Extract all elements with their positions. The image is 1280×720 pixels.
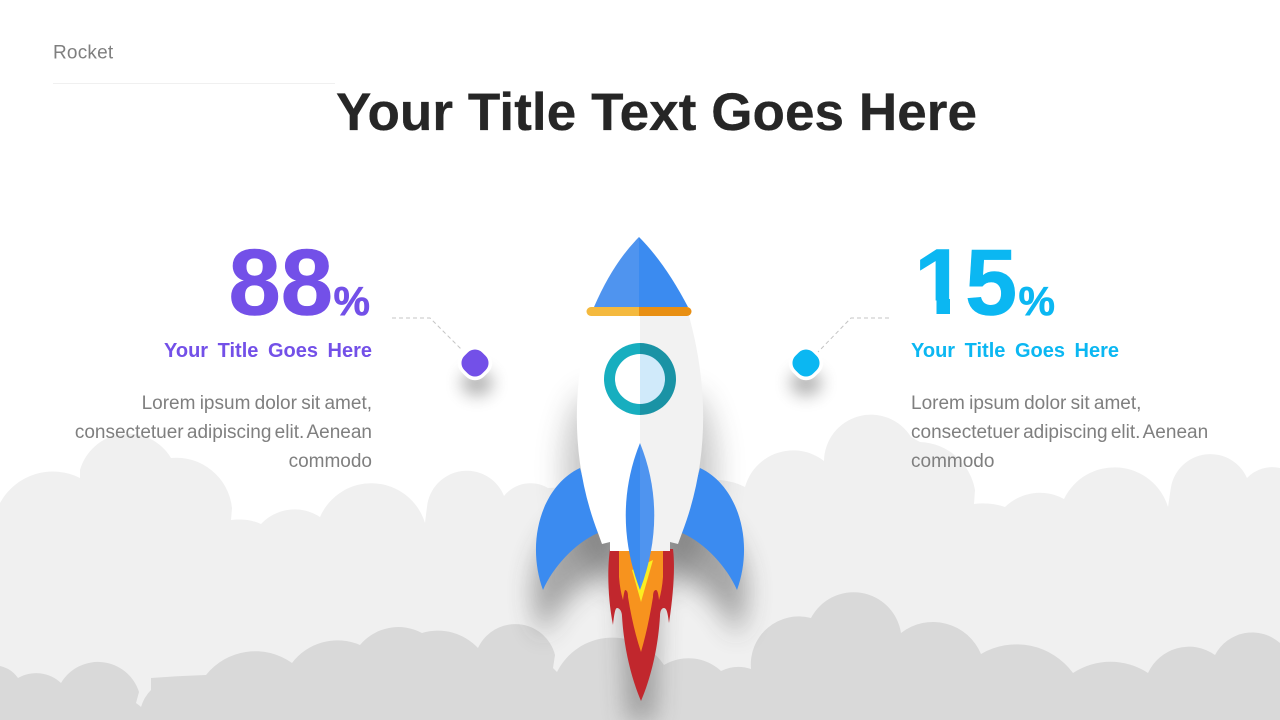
left stat body: commodo: [289, 451, 372, 472]
body right half: [640, 316, 703, 551]
right marker dot: [783, 340, 829, 396]
body left half: [577, 316, 640, 551]
back cloud layer: [0, 415, 1280, 720]
left stat heading: Your Title Goes Here: [164, 340, 372, 362]
left stat number: 88: [228, 230, 333, 334]
rocket wing and flame shadow: [533, 513, 747, 720]
flame: red outer: [608, 549, 674, 701]
window glass left: [615, 354, 640, 404]
right stat body: Lorem ipsum dolor sit amet,: [911, 393, 1141, 414]
center fin left: [626, 443, 640, 590]
left stat block: [75, 230, 372, 472]
right stat number: [920, 249, 1015, 316]
header label: Rocket: [53, 42, 114, 64]
right connector line: [818, 318, 889, 352]
left wing: [536, 468, 598, 590]
stem extension replacing the removed foot: [936, 299, 950, 314]
nose cone left: [594, 237, 639, 307]
window ring left: [604, 343, 640, 415]
left stat body: Lorem ipsum dolor sit amet,: [142, 393, 372, 414]
right stat heading: Your Title Goes Here: [911, 340, 1119, 362]
collar left: [586, 307, 639, 316]
right percent sign: %: [1018, 278, 1055, 324]
right stat body: commodo: [911, 451, 994, 472]
left percent sign: %: [334, 278, 370, 324]
window glass right: [640, 354, 665, 404]
right stat block: [911, 249, 1207, 467]
window ring right: [640, 343, 676, 415]
nose cone right: [639, 237, 688, 307]
title: Your Title Text Goes Here: [336, 83, 977, 142]
collar right: [639, 307, 692, 316]
right stat number: 5: [965, 230, 1017, 334]
left marker dot: [452, 340, 498, 396]
rocket: [536, 237, 744, 701]
left connector line: [392, 318, 462, 350]
right wing: [682, 468, 744, 590]
front cloud layer: [0, 592, 1280, 720]
flame: orange inner: [619, 550, 663, 652]
rocket body shadow: [564, 395, 716, 585]
flame: yellow core: [632, 560, 653, 602]
right stat body: consectetuer adipiscing elit. Aenean: [911, 422, 1208, 443]
center fin right: [640, 443, 654, 590]
right stat number: 1: [914, 229, 966, 334]
left stat body: consectetuer adipiscing elit. Aenean: [75, 422, 372, 443]
